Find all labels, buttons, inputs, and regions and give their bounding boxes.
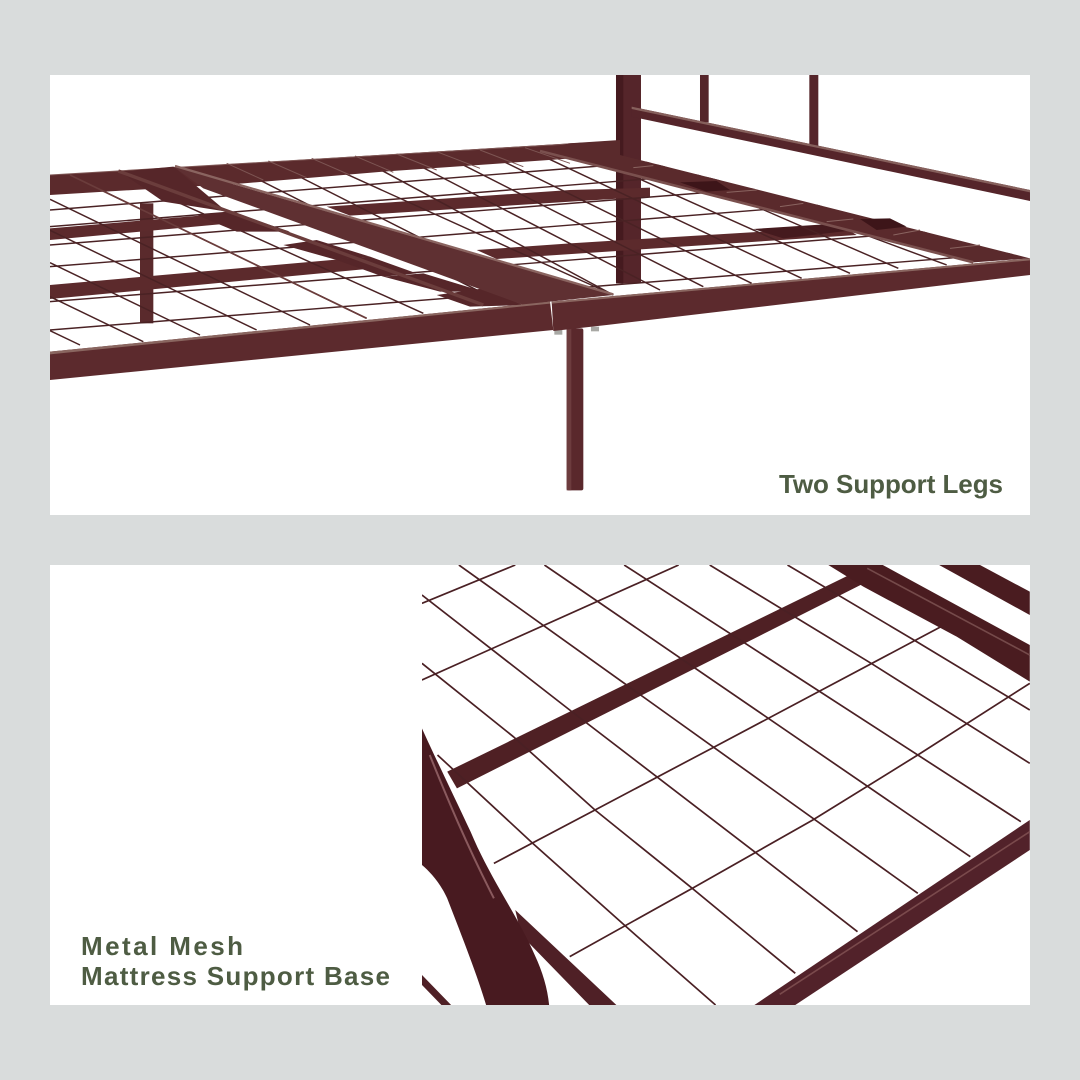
right channel openings xyxy=(680,181,907,230)
metal mesh wires xyxy=(50,160,1012,346)
mesh wires xyxy=(422,565,1030,1005)
panel: two support legs xyxy=(50,75,1030,515)
caption: two support legs: Two Support Legs xyxy=(779,469,1003,499)
lower side rail xyxy=(515,910,616,1005)
front rail xyxy=(50,258,1030,380)
cross rails under mesh xyxy=(50,188,857,299)
right side rail xyxy=(828,565,1030,682)
panel: metal mesh base xyxy=(50,565,1030,1005)
curved footboard tube xyxy=(422,728,549,1005)
caption: metal mesh mattress support base: Mattress Support Base xyxy=(81,961,390,991)
infographic canvas xyxy=(50,75,1030,1005)
right channel slats xyxy=(633,166,980,248)
illustration: bed frame with centre support leg xyxy=(50,75,1030,490)
mesh support bar xyxy=(447,570,867,788)
right side channel xyxy=(540,140,1030,262)
rear centre support leg xyxy=(140,203,153,323)
corner tube fragment xyxy=(422,975,451,1005)
caption: metal mesh mattress support base: Metal Mesh xyxy=(81,931,243,961)
right channel flange xyxy=(540,151,973,262)
left channel pieces xyxy=(120,167,523,307)
centre beam xyxy=(173,167,613,305)
back rail highlight and slats xyxy=(50,144,570,180)
headboard post and rear leg xyxy=(616,75,1030,283)
far corner rail xyxy=(939,565,1030,615)
front rail xyxy=(754,820,1030,1005)
illustration: mesh close-up xyxy=(422,565,1030,1005)
caption: metal mesh mattress support base xyxy=(81,931,390,991)
centre support leg xyxy=(554,327,599,490)
left channel flange xyxy=(118,171,483,305)
back rail xyxy=(50,143,573,195)
